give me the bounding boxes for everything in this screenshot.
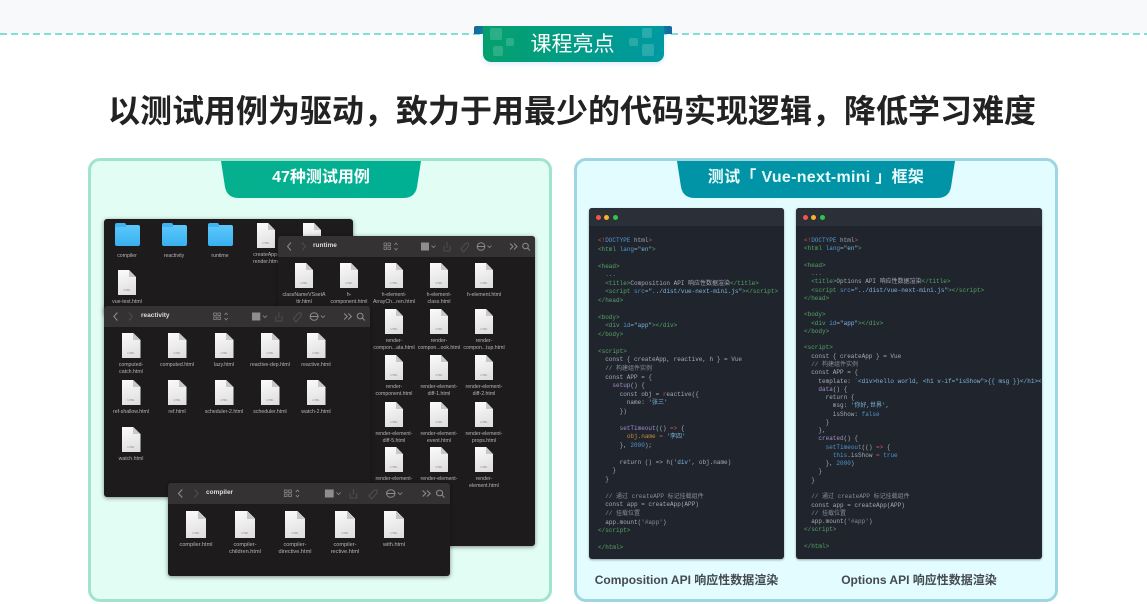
- file: h-element-ArrayCh: HTML: [390, 282, 398, 285]
- panel tab: 47 test cases: 47种测试用例: [272, 169, 370, 186]
- file: compiler-directive: [278, 511, 312, 555]
- file: h-element: [467, 263, 501, 298]
- file: reactive: HTML: [312, 352, 320, 355]
- file: h-element-class: [427, 263, 452, 304]
- file: vue-test: HTML: [123, 289, 131, 292]
- file: with: [383, 511, 405, 548]
- file: reactive-dep: HTML: [266, 352, 274, 355]
- file: createApp-render: createApp-: [253, 252, 279, 258]
- file: render-element-a: HTML: [390, 466, 398, 469]
- badge front plate: [483, 26, 664, 62]
- file: h-element-class: h-element-: [427, 292, 451, 298]
- file: render-element-diff-5: HTML: [390, 421, 398, 424]
- file: render-element-event: render-element-: [421, 431, 457, 437]
- file: render-compon-tup: HTML: [480, 328, 488, 331]
- file: ref-shallow: [113, 380, 149, 415]
- code window: Composition API: [589, 208, 784, 559]
- file: render-element: HTML: [480, 466, 488, 469]
- file: render-element: [469, 447, 499, 488]
- file: computed-catch: computed-: [119, 362, 143, 368]
- file: render-compon-ook: compon...ook.html: [418, 344, 460, 350]
- file: lazy: lazy.html: [214, 362, 234, 368]
- file: render-element-a: html: [389, 482, 399, 488]
- panel tab: Vue-next-mini: 测试「 Vue-next-mini 」框架: [708, 169, 924, 186]
- folder: reactivity: reactivity: [164, 253, 184, 259]
- file: vue-test: [112, 270, 142, 305]
- file: scheduler: HTML: [266, 399, 274, 402]
- file: scheduler: scheduler.html: [253, 409, 287, 415]
- file: h-element-class: HTML: [435, 282, 443, 285]
- runtime toolbar: runtime: [313, 242, 337, 249]
- file: computed: computed.html: [160, 362, 194, 368]
- file: scheduler-2: scheduler-2.html: [205, 409, 243, 415]
- file: compiler-directive: HTML: [291, 532, 299, 535]
- file: render-element-diff-5: [376, 402, 412, 444]
- file: render-compon-tup: render-: [476, 338, 492, 344]
- file: render-element-diff-2: diff-2.html: [473, 390, 495, 396]
- top band background: [0, 0, 1147, 34]
- file: render-element-a: render-element-: [376, 476, 412, 482]
- file: render-element-event: [420, 402, 458, 444]
- folder: reactivity: [162, 223, 187, 259]
- reactivity toolbar: reactivity: [141, 312, 170, 319]
- finder window: root folder: [104, 219, 353, 315]
- file: reactive: [301, 333, 331, 368]
- file: render-element: element.html: [469, 482, 499, 488]
- main heading: 以测试用例为驱动，致力于用最少的代码实现逻辑，降低学习难度: [108, 93, 1036, 129]
- file: compiler: HTML: [192, 532, 200, 535]
- file: h-element-class: class.html: [427, 298, 451, 304]
- file: render-element-diff-2: render-element-: [466, 384, 502, 390]
- file: render-element-diff-2: [466, 355, 502, 396]
- folder: runtime: runtime: [211, 253, 229, 259]
- runtime toolbar: [278, 236, 535, 257]
- compiler toolbar: compiler: [206, 489, 233, 496]
- code window: Options API: [796, 208, 1042, 559]
- file: render-element-b: render-element-: [421, 476, 457, 482]
- file: render-component: render-: [386, 384, 402, 390]
- file: computed: [160, 333, 194, 368]
- file: compiler-children: children.html: [229, 549, 261, 555]
- file: h-component: [330, 263, 368, 304]
- compiler toolbar: [168, 483, 450, 504]
- file: classNameVSsetAttr: HTML: [300, 282, 308, 285]
- file: ref: ref.html: [168, 409, 186, 415]
- file: h-element: h-element.html: [467, 292, 501, 298]
- dashed section divider: [0, 33, 1147, 35]
- file: render-element-props: HTML: [480, 421, 488, 424]
- file: watch: HTML: [127, 446, 135, 449]
- file: render-element-a: [376, 447, 412, 488]
- file: computed-catch: [119, 333, 143, 374]
- panel: test cases: [88, 158, 552, 602]
- file: render-element-diff-1: HTML: [435, 374, 443, 377]
- file: computed-catch: HTML: [127, 352, 135, 355]
- file: createApp-render: render.html: [253, 258, 279, 264]
- file: h-element-ArrayCh: h-element-: [382, 292, 406, 298]
- file: compiler-rective: HTML: [341, 532, 349, 535]
- window title bar: [796, 208, 1042, 226]
- file: with: with.html: [383, 542, 405, 548]
- file: render-element-diff-2: HTML: [480, 374, 488, 377]
- file: h-element: HTML: [480, 282, 488, 285]
- badge back ribbon: [474, 26, 672, 34]
- file: reactive-dep: [250, 333, 290, 368]
- panel tab: Vue-next-mini: [677, 161, 955, 198]
- file: computed: HTML: [173, 352, 181, 355]
- caption: Options API: Options API 响应性数据渲染: [841, 573, 997, 587]
- file: scheduler: [253, 380, 287, 415]
- file: h-element-ArrayCh: ArrayCh...ren.html: [373, 298, 415, 304]
- file: watch-2: HTML: [312, 399, 320, 402]
- file: compiler: [180, 511, 212, 548]
- file: lazy: HTML: [220, 352, 228, 355]
- reactivity toolbar: [104, 306, 370, 327]
- file: compiler: compiler.html: [180, 542, 212, 548]
- file: render-element-b: HTML: [435, 466, 443, 469]
- file: render-element-event: HTML: [435, 421, 443, 424]
- file: ref-shallow: ref-shallow.html: [113, 409, 149, 415]
- file: render-compon-ata: [373, 309, 415, 350]
- file: render-compon-ook: render-: [431, 338, 447, 344]
- file: render-element-event: event.html: [427, 438, 451, 444]
- file: ref-shallow: HTML: [127, 399, 135, 402]
- file: render-component: component.html: [376, 390, 412, 396]
- file: classNameVSsetAttr: ttr.html: [296, 298, 312, 304]
- file: render-element-diff-5: diff-5.html: [383, 438, 405, 444]
- file: lazy: [214, 333, 234, 368]
- file: render-element-b: [420, 447, 458, 488]
- window title bar: [589, 208, 784, 226]
- file: compiler-rective: compiler-: [333, 542, 356, 548]
- file: computed-catch: catch.html: [119, 368, 143, 374]
- file: render-compon-ata: compon...ata.html: [373, 344, 415, 350]
- file: render-element-props: props.html: [472, 438, 496, 444]
- panel tab: 47 test cases: [221, 161, 421, 198]
- file: compiler-children: compiler-: [233, 542, 256, 548]
- file: render-component: [376, 355, 412, 396]
- folder: compiler: compiler: [117, 253, 137, 259]
- file: classNameVSsetAttr: [282, 263, 326, 304]
- file: compiler-directive: compiler-: [283, 542, 306, 548]
- folder: compiler: [115, 223, 140, 259]
- file: reactive-dep: reactive-dep.html: [250, 362, 290, 368]
- panel: framework tests: [574, 158, 1058, 602]
- file: compiler-children: [229, 511, 261, 555]
- file: render-element-diff-1: diff-1.html: [428, 390, 450, 396]
- file: h-component: h-: [347, 292, 351, 298]
- file: render-compon-ata: render-: [386, 338, 402, 344]
- file: scheduler-2: HTML: [220, 399, 228, 402]
- file: render-compon-ook: [418, 309, 460, 350]
- file: classNameVSsetAttr: classNameVSsetA: [283, 292, 325, 298]
- file: scheduler-2: [205, 380, 243, 415]
- file: render-element-diff-1: [420, 355, 458, 396]
- finder window: runtime: [278, 236, 535, 546]
- source code: <!DOCTYPE html> <html lang="en"> <head> ... <title>Composition API 响应性数据渲染</title> <script src="../dist/vue-next-mini.js"></script> </head> <body> <div id="app"></div> </body> <script> const { createApp, reactive, h } = Vue // 构建组件实例 const APP = { setup() { const obj = reactive({ name: '张三' }) setTimeout(() => { obj.name = '李四' }, 2000); return () => h('div', obj.name) } } // 通过 createAPP 标记挂载组件 const app = createApp(APP) // 挂载位置 app.mount('#app') </script> </html>: [598, 237, 778, 551]
- finder window: reactivity: [104, 306, 370, 497]
- folder: runtime: [208, 223, 233, 259]
- file: reactive: reactive.html: [301, 362, 331, 368]
- file: h-component: component.html: [331, 298, 367, 304]
- file: render-component: HTML: [390, 374, 398, 377]
- file: h-element-ArrayCh: [373, 263, 415, 304]
- file: createApp-render: HTML: [262, 242, 270, 245]
- badge text: 课程亮点: [530, 33, 614, 56]
- file: render-element-b: html: [434, 482, 444, 488]
- file: with: HTML: [390, 532, 398, 535]
- file: render-compon-tup: compon...tup.html: [463, 344, 505, 350]
- file: ref: HTML: [173, 399, 181, 402]
- file: render-element: render-: [476, 476, 492, 482]
- file: partially hidden: HTML: [308, 242, 316, 245]
- file: compiler-children: HTML: [241, 532, 249, 535]
- finder window: compiler: [168, 483, 450, 576]
- file: compiler-directive: directive.html: [279, 549, 311, 555]
- section badge: course highlights: [474, 26, 672, 66]
- file: render-compon-ook: HTML: [435, 328, 443, 331]
- file: watch: [118, 427, 144, 462]
- file: render-compon-tup: [463, 309, 505, 350]
- file: render-element-props: render-element-: [466, 431, 502, 437]
- file: compiler-rective: [331, 511, 359, 555]
- file: render-element-diff-5: render-element-: [376, 431, 412, 437]
- file: vue-test: vue-test.html: [112, 299, 142, 305]
- file: compiler-rective: rective.html: [331, 549, 359, 555]
- file: render-compon-ata: HTML: [390, 328, 398, 331]
- file: watch-2: watch-2.html: [301, 409, 331, 415]
- file: render-element-diff-1: render-element-: [421, 384, 457, 390]
- caption: Composition API: Composition API 响应性数据渲染: [595, 573, 778, 587]
- file: watch-2: [301, 380, 331, 415]
- file: render-element-props: [466, 402, 502, 444]
- file: h-component: HTML: [345, 282, 353, 285]
- file: ref: [168, 380, 186, 415]
- file: createApp-render: [253, 223, 279, 264]
- file: watch: watch.html: [119, 456, 143, 462]
